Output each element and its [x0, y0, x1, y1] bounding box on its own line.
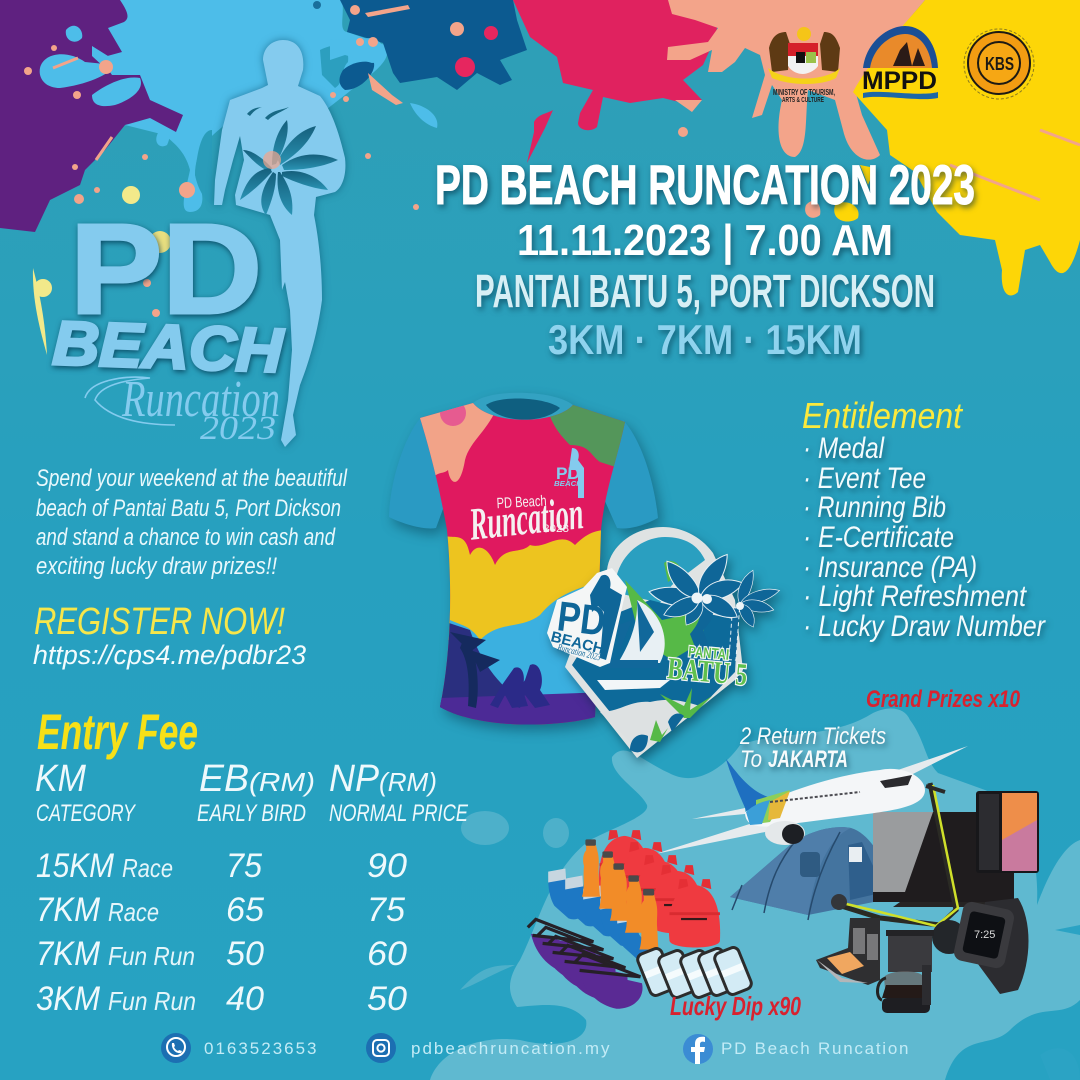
jakarta tickets label: To	[740, 746, 762, 773]
logo: MPPD: MPPD	[862, 67, 937, 95]
logo: KBS: KBS	[985, 54, 1014, 74]
medal: leaves	[650, 688, 712, 742]
bottom pale wave panel	[430, 709, 1080, 1080]
medal: logo tag: Runcation 2023	[556, 642, 602, 664]
logo: Runcation 2023 script: Runcation	[121, 371, 280, 428]
column headers: EB	[199, 758, 249, 800]
footer contacts	[161, 1033, 910, 1064]
column headers: NP	[329, 758, 380, 800]
register call to action: REGISTER NOW!	[34, 601, 285, 643]
panel: entry fee table	[35, 704, 469, 1018]
fee rows: 75	[367, 891, 405, 929]
medal: Pantai Batu 5 text: BATU 5	[666, 650, 749, 692]
t-shirt small logo	[554, 448, 584, 498]
prize: tent	[730, 827, 899, 920]
icon: facebook	[683, 1034, 713, 1064]
lucky dip: water bottles	[582, 839, 659, 950]
entitlement list	[802, 395, 1046, 643]
distances: 3KM · 7KM · 15KM	[548, 316, 862, 363]
lucky dip label: Lucky Dip x90	[670, 991, 801, 1021]
register call to action	[33, 601, 306, 670]
jakarta tickets label: JAKARTA	[768, 746, 848, 773]
logo: KBS	[964, 29, 1034, 99]
t-shirt print text	[470, 494, 584, 540]
fee rows: Race	[108, 897, 159, 927]
t-shirt print text: 2023	[543, 523, 569, 535]
logo: ministry crest	[768, 27, 840, 104]
logo: PD BEACH wordmark	[52, 198, 285, 386]
logo: Runcation 2023 script	[85, 371, 280, 447]
website: pdbeachruncation.my	[411, 1039, 611, 1058]
column headers: (RM)	[249, 767, 315, 797]
list items: · E-Certificate	[803, 521, 954, 554]
t-shirt small logo: PD	[556, 464, 580, 483]
fee rows: 60	[367, 935, 407, 973]
list items: · Medal	[803, 432, 885, 465]
t-shirt print text: Runcation	[466, 487, 586, 550]
jakarta tickets label: 2 Return Tickets	[739, 723, 886, 750]
facebook page: PD Beach Runcation	[721, 1039, 910, 1058]
list items: · Event Tee	[803, 462, 926, 495]
prize: laptop	[873, 812, 1015, 907]
logo: ministry crest: MINISTRY OF TOURISM,	[773, 88, 835, 97]
medal: logo tag	[547, 568, 627, 667]
column headers: CATEGORY	[36, 800, 136, 827]
prize: coffee maker	[877, 930, 934, 1013]
intro text: and stand a chance to win cash and	[36, 524, 336, 551]
prize: sandwich maker	[816, 918, 880, 985]
intro text: exciting lucky draw prizes!!	[36, 553, 277, 580]
fee rows: 90	[367, 847, 407, 885]
intro text: beach of Pantai Batu 5, Port Dickson	[36, 495, 341, 522]
lucky dip: phone pouches	[636, 946, 753, 999]
heading: Entry Fee	[37, 704, 198, 760]
fee rows: 50	[226, 935, 264, 973]
fee rows: 40	[226, 980, 264, 1018]
partner logos	[768, 26, 1034, 104]
list items: · Light Refreshment	[803, 580, 1027, 613]
event t-shirt	[389, 393, 658, 740]
column headers	[35, 758, 469, 827]
list items: · Running Bib	[803, 491, 946, 524]
fee rows: 3KM	[36, 980, 101, 1018]
t-shirt print text: PD Beach	[496, 493, 547, 512]
intro text: Spend your weekend at the beautiful	[36, 465, 348, 492]
fee rows	[36, 847, 407, 1018]
heading: Entitlement	[802, 395, 964, 436]
fee rows: 65	[226, 891, 264, 929]
whatsapp number: 0163523653	[204, 1039, 318, 1058]
column headers: KM	[35, 758, 86, 800]
icon: whatsapp	[161, 1033, 191, 1063]
lucky dip: socks	[548, 868, 652, 960]
prize: smartphone	[976, 791, 1039, 873]
register call to action: https://cps4.me/pdbr23	[33, 640, 306, 670]
list items: · Insurance (PA)	[803, 551, 977, 584]
icon: instagram	[366, 1033, 396, 1063]
medal: Pantai Batu 5 text: PANTAI	[687, 643, 730, 664]
column headers: (RM)	[379, 767, 437, 797]
fee rows: 7KM	[36, 935, 101, 973]
fee rows: 15KM	[36, 847, 115, 885]
date and time: 11.11.2023 | 7.00 AM	[517, 216, 893, 266]
event headline	[435, 153, 975, 363]
medal: sailboat	[597, 600, 670, 690]
logo: ministry crest: ARTS & CULTURE	[782, 95, 824, 104]
logo: PD BEACH wordmark: BEACH	[52, 309, 285, 386]
jakarta tickets label	[739, 723, 886, 773]
paint splash: top	[0, 0, 1080, 296]
prize: airplane	[655, 746, 968, 854]
list items	[803, 432, 1046, 643]
fee rows: Fun Run	[108, 941, 195, 971]
lucky dip: backpacks	[599, 830, 720, 947]
logo: Runcation 2023 script: 2023	[200, 410, 276, 447]
fee rows: 7KM	[36, 891, 101, 929]
lucky dip: waist bags	[528, 919, 643, 1009]
logo: runner silhouette	[214, 40, 345, 447]
fee rows: 50	[367, 980, 407, 1018]
logo: MPPD	[862, 26, 938, 99]
fee rows: Fun Run	[108, 986, 196, 1016]
medal: logo tag: BEACH	[549, 628, 606, 658]
finisher medal	[547, 527, 781, 758]
medal: palm trees	[648, 549, 781, 660]
fee rows: 75	[226, 847, 262, 885]
t-shirt small logo: BEACH	[554, 481, 583, 488]
prize: smartwatch: 7:25	[974, 929, 995, 941]
medal: Pantai Batu 5 text	[666, 643, 749, 692]
logo: PD BEACH wordmark: PD	[70, 198, 262, 341]
icon: birds	[247, 107, 289, 120]
prize: smartwatch	[952, 898, 1028, 994]
icon: palm tree	[240, 120, 338, 215]
prize: electric scooter	[831, 783, 966, 954]
medal: logo tag: PD	[555, 592, 608, 645]
intro text	[36, 465, 348, 580]
grand prizes label: Grand Prizes x10	[866, 686, 1021, 713]
paint dots	[24, 1, 702, 355]
column headers: NORMAL PRICE	[329, 800, 469, 827]
fee rows: Race	[122, 853, 173, 883]
column headers: EARLY BIRD	[197, 800, 306, 827]
